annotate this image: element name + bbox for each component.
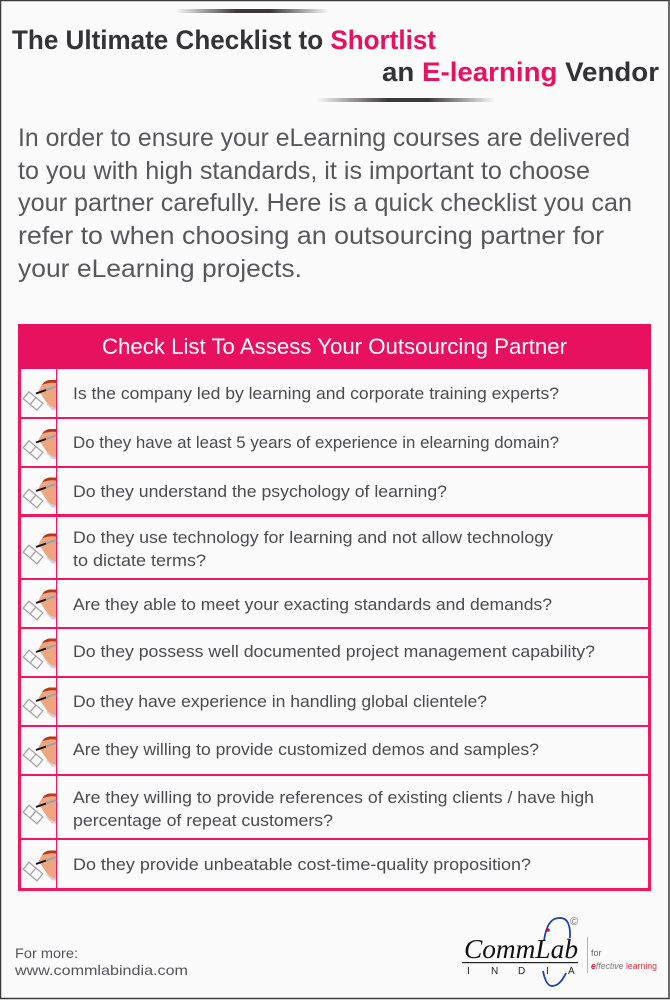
- icon: hand ticking checklist, row 3: [23, 478, 56, 508]
- row 10 text: Do they provide unbeatable cost-time-quality proposition?: [73, 855, 531, 874]
- footer link text: www.commlabindia.com: [14, 962, 188, 978]
- row 4 text: to dictate terms?: [73, 551, 206, 570]
- logo wordmark: CommLab: [464, 933, 578, 964]
- panel: checklist table: [18, 324, 651, 891]
- logo: CommLab India: [462, 916, 657, 986]
- intro paragraph: your eLearning projects.: [18, 255, 302, 283]
- logo India letters: I: [467, 966, 470, 977]
- title: [12, 25, 659, 87]
- row 9 text: percentage of repeat customers?: [73, 811, 333, 830]
- row 4 text: [73, 528, 554, 570]
- icon: hand ticking checklist, row 2: [23, 429, 56, 459]
- intro paragraph: [18, 124, 632, 283]
- logo tagline: [591, 948, 657, 971]
- intro paragraph: to you with high standards, it is important to choose: [18, 157, 590, 185]
- logo copyright mark: ©: [570, 916, 578, 928]
- row 7 text: Do they have experience in handling global clientele?: [73, 692, 487, 711]
- row 4 text: Do they use technology for learning and not allow technology: [73, 528, 554, 547]
- logo red dot: [546, 928, 550, 932]
- row 6 text: Do they possess well documented project management capability?: [73, 642, 595, 661]
- decorative bar: bottom of title: [316, 98, 496, 102]
- row 5 text: Are they able to meet your exacting standards and demands?: [73, 595, 552, 614]
- icon: hand ticking checklist, row 6: [23, 638, 56, 669]
- row 9 text: [73, 788, 594, 830]
- icon: hand ticking checklist, row 9: [23, 794, 56, 824]
- logo tagline: for: [591, 948, 602, 958]
- icon: hand ticking checklist, row 8: [23, 736, 56, 767]
- title: an E-learning Vendor: [382, 57, 659, 87]
- row 2 text: Do they have at least 5 years of experience in elearning domain?: [73, 433, 559, 452]
- row 9 text: Are they willing to provide references of existing clients / have high: [73, 788, 594, 807]
- row 8 text: Are they willing to provide customized demos and samples?: [73, 740, 539, 759]
- row 3 text: Do they understand the psychology of learning?: [73, 482, 447, 501]
- table frame and row lines: [18, 369, 651, 891]
- row 1 text: Is the company led by learning and corporate training experts?: [73, 384, 559, 403]
- icon: hand ticking checklist, row 4: [23, 534, 56, 564]
- icon: hand ticking checklist, row 5: [23, 590, 56, 620]
- intro paragraph: refer to when choosing an outsourcing partner for: [18, 222, 604, 250]
- icon: hand ticking checklist, row 7: [23, 688, 56, 718]
- logo orbit arcs: [543, 918, 570, 986]
- logo India letters: N: [491, 966, 498, 977]
- table header: Check List To Assess Your Outsourcing Partner: [102, 334, 567, 359]
- title: The Ultimate Checklist to Shortlist: [12, 25, 436, 55]
- intro paragraph: In order to ensure your eLearning courses are delivered: [18, 124, 630, 152]
- table header: [18, 324, 651, 369]
- icon: hand ticking checklist, row 10: [23, 850, 56, 881]
- footer link text: For more:: [15, 945, 78, 961]
- icon: hand ticking checklist, row 1: [23, 380, 56, 410]
- logo India letters: I: [546, 966, 549, 977]
- footer link text: [14, 945, 188, 978]
- intro paragraph: your partner carefully. Here is a quick checklist you can: [18, 189, 632, 217]
- logo tagline: effective learning: [591, 961, 657, 971]
- logo India letters: D: [518, 966, 525, 977]
- logo India letters: [467, 966, 575, 977]
- decorative bar: top of title: [175, 9, 329, 13]
- logo India letters: A: [568, 966, 575, 977]
